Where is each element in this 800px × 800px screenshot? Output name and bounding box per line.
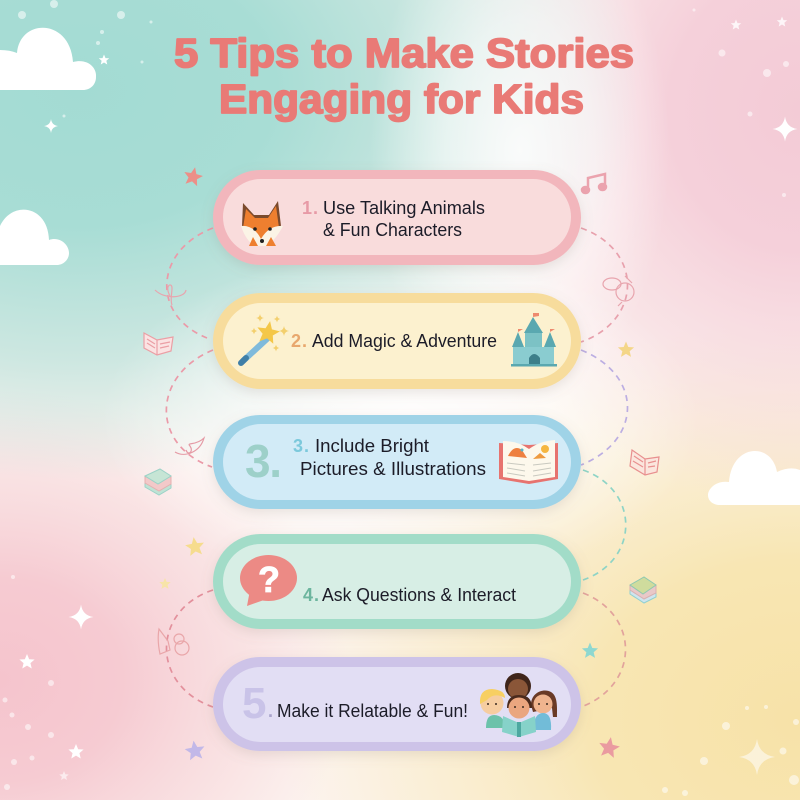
text: tip 1 [302,198,485,240]
icon: ribbon scribble left [155,285,186,305]
icon: open picture book [499,440,558,484]
icon: magic wand [241,314,289,363]
decorative icons around the list [144,165,659,761]
text: tip 3: 3. [293,436,309,456]
big number 3: 3. [245,435,282,487]
icon: ribbon scribble mid [175,438,204,454]
icon: open book outline left [144,333,173,355]
text: tip 2: Add Magic & Adventure [312,331,497,351]
icon: stacked books left [145,469,171,495]
text: tip 5: Make it Relatable & Fun! [277,701,468,721]
panel: tip 1 [213,170,581,265]
text: tip 4: Ask Questions & Interact [322,585,516,605]
text: tip 1: Use Talking Animals [323,198,485,218]
icon: faint star [159,578,171,589]
icon: stacked books right [630,577,656,603]
text: tip 3: Pictures & Illustrations [300,459,486,479]
panel: tip 4 [213,534,581,629]
text: tip 1: 1. [302,198,318,218]
icon: pink star [597,735,621,759]
text: tip 5: . [268,701,273,721]
icon: music note [582,174,606,193]
text: tip 4: 4. [303,585,319,605]
icon: question speech bubble [240,555,297,606]
icon: children reading [480,673,557,737]
panel: tip 5 [213,657,581,751]
icon: question speech bubble: ? [258,559,280,600]
text: tip 1: & Fun Characters [323,220,462,240]
text: tip 3: Include Bright [315,436,429,456]
icon: teal star [582,642,598,658]
icon: castle [511,313,557,366]
big number 5: 5 [242,679,266,728]
icon: bunny outline right [603,276,634,306]
title [174,30,634,122]
title: 5 Tips to Make Stories [174,30,634,76]
icon: open book outline right [630,450,659,475]
title: Engaging for Kids [219,76,584,122]
dashed connector paths [166,228,628,707]
icon: purple star [184,739,206,761]
panel: tip 2 [213,293,581,389]
white clouds [0,28,800,505]
icon: yellow star right [618,342,634,357]
panel: tip 3 [213,415,581,509]
icon: fox [241,201,283,246]
icon: yellow star left [184,536,206,556]
text: tip 3 [293,436,486,479]
icon: coral star [182,165,204,187]
text: tip 2: 2. [291,331,307,351]
icon: bunny outline left [158,629,189,655]
